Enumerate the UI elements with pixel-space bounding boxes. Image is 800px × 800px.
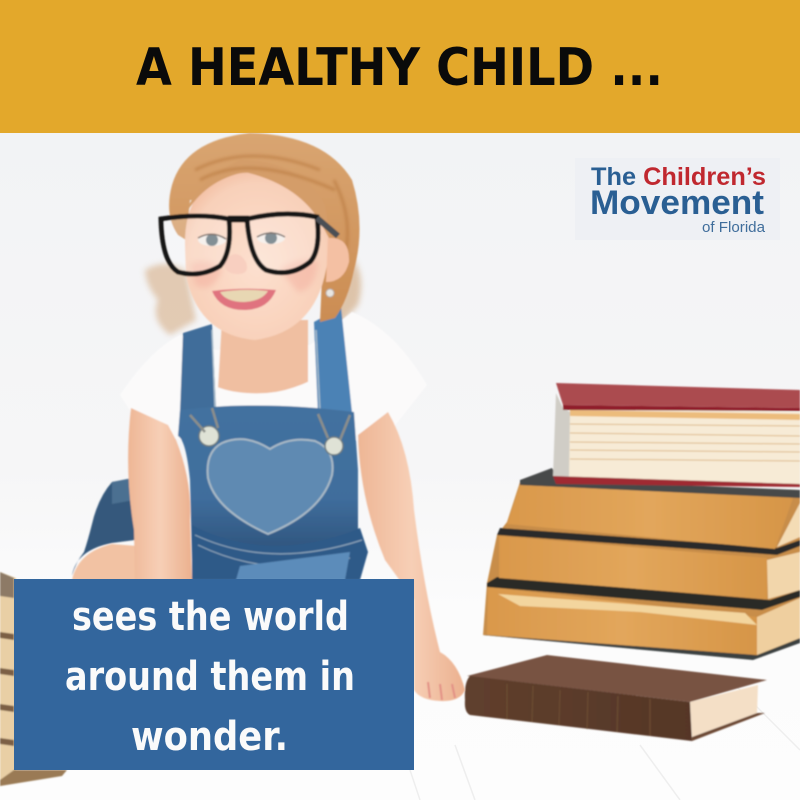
book pages: [690, 685, 758, 737]
stack backing: [483, 482, 800, 659]
child: [72, 133, 465, 701]
left edge books: [0, 572, 67, 786]
neck and chest: [218, 320, 308, 393]
third book: [487, 536, 800, 610]
hair strands: [195, 156, 348, 250]
right arm and hand: [358, 412, 465, 701]
logo line 2: Movement: [590, 184, 764, 222]
finger lines: [428, 682, 455, 700]
title banner: [0, 0, 800, 133]
cheeks: [190, 260, 318, 292]
right hair wisps: [325, 250, 361, 325]
title text: A HEALTHY CHILD ...: [136, 38, 663, 98]
overall waist: [192, 525, 368, 580]
book cover top: [467, 655, 767, 702]
lower cover edge: [692, 713, 765, 741]
nose: [224, 254, 247, 274]
book stack: [483, 383, 800, 660]
heart pocket: [208, 439, 333, 534]
overall bib: [178, 405, 358, 560]
waist band stitching: [195, 535, 362, 566]
left arm: [128, 408, 192, 582]
hair back: [169, 133, 360, 322]
book spine: [465, 676, 692, 741]
logo line 1: The Children’s: [591, 163, 766, 191]
message panel: [14, 579, 414, 770]
bottom book: [483, 587, 800, 660]
face: [185, 173, 329, 340]
message line 2: around them in: [65, 654, 355, 700]
left eye: [198, 234, 226, 246]
right button: [325, 437, 343, 455]
earring: [326, 289, 334, 297]
lower denim highlight: [236, 552, 350, 580]
left button: [199, 426, 219, 446]
right eye: [257, 232, 285, 244]
ear: [326, 238, 349, 282]
message line 1: sees the world: [72, 594, 349, 640]
back leg and shorts: [72, 478, 138, 582]
shirt neckline: [212, 380, 316, 415]
loose hair wisps: [145, 264, 196, 335]
overall straps: [180, 307, 352, 414]
hair fringe: [185, 160, 330, 240]
logo line 3: of Florida: [702, 219, 766, 236]
logo: The Children's Movement of Florida: [575, 158, 780, 240]
buckles: [190, 408, 350, 440]
smile: [212, 289, 276, 310]
message line 3: wonder.: [131, 714, 288, 760]
t-shirt: [120, 312, 427, 440]
top red book: [553, 383, 800, 487]
glasses: [161, 214, 338, 274]
second book: [497, 468, 800, 555]
brown book on floor: [465, 655, 767, 741]
